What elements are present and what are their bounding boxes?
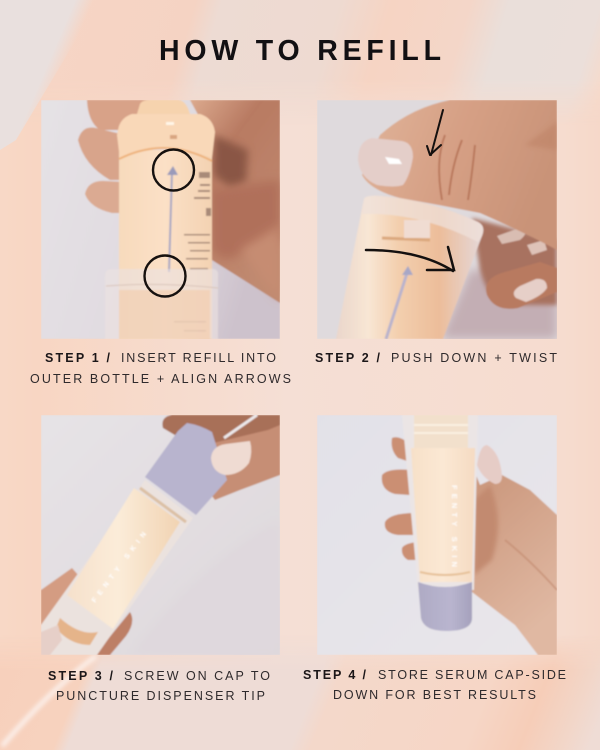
title: HOW TO REFILL (159, 35, 441, 67)
panel: step 2 photo (317, 100, 557, 339)
caption: step 3 (48, 669, 270, 703)
icon: fingers behind bottle (382, 437, 418, 560)
icon: hand on right (472, 470, 557, 655)
text on bottle: brand name: FENTY SKIN (450, 485, 459, 567)
panel: step 3 photo (41, 415, 280, 655)
caption: step 4: STEP 4 / (303, 668, 367, 682)
icon: downward arrow (427, 110, 443, 155)
icon: alignment arrow on bottle (167, 166, 178, 272)
icon: bottle with refill (402, 415, 478, 590)
icon: nail on hand (477, 445, 502, 484)
icon: curved arrow twist (366, 247, 454, 271)
icon: lower fingers (472, 218, 557, 309)
caption: step 3: PUNCTURE DISPENSER TIP (56, 689, 265, 703)
caption: step 4: DOWN FOR BEST RESULTS (333, 688, 536, 702)
text on bottle: brand name: FENTY SKIN (91, 531, 148, 604)
icon: translucent outer bottle (336, 196, 483, 339)
panel: step 1 photo (41, 100, 280, 340)
panel: step 4 photo (317, 415, 557, 655)
icon: refill bottle (117, 100, 215, 340)
icon: purple cap (145, 423, 227, 515)
icon: thumb pressing bottle (362, 100, 557, 250)
caption: step 3: SCREW ON CAP TO (124, 669, 270, 683)
icon: tilted bottle (41, 480, 193, 655)
caption: step 1: INSERT REFILL INTO (121, 351, 276, 365)
icon: circle on lower arrow (144, 256, 186, 296)
caption: step 2: PUSH DOWN + TWIST (391, 351, 557, 365)
icon: hand holding bottle (41, 568, 132, 655)
caption: step 1 (30, 351, 291, 386)
caption: step 2: STEP 2 / (315, 351, 381, 365)
icon: outer bottle sleeve (105, 269, 218, 339)
icon: hand holding cap (162, 415, 280, 500)
icon: purple cap down (418, 582, 472, 631)
caption: step 4: STORE SERUM CAP-SIDE (378, 668, 566, 682)
icon: hand holding refill (78, 100, 280, 303)
icon: circle on upper arrow (153, 150, 194, 190)
caption: step 4 (303, 668, 566, 702)
caption: step 3: STEP 3 / (48, 669, 114, 683)
icon: thumb nail on cap (211, 441, 251, 475)
caption: step 2 (315, 351, 557, 365)
caption: step 1: OUTER BOTTLE + ALIGN ARROWS (30, 372, 291, 386)
icon: nail (358, 138, 413, 186)
caption: step 1: STEP 1 / (45, 351, 111, 365)
bottle fine print (174, 172, 211, 332)
